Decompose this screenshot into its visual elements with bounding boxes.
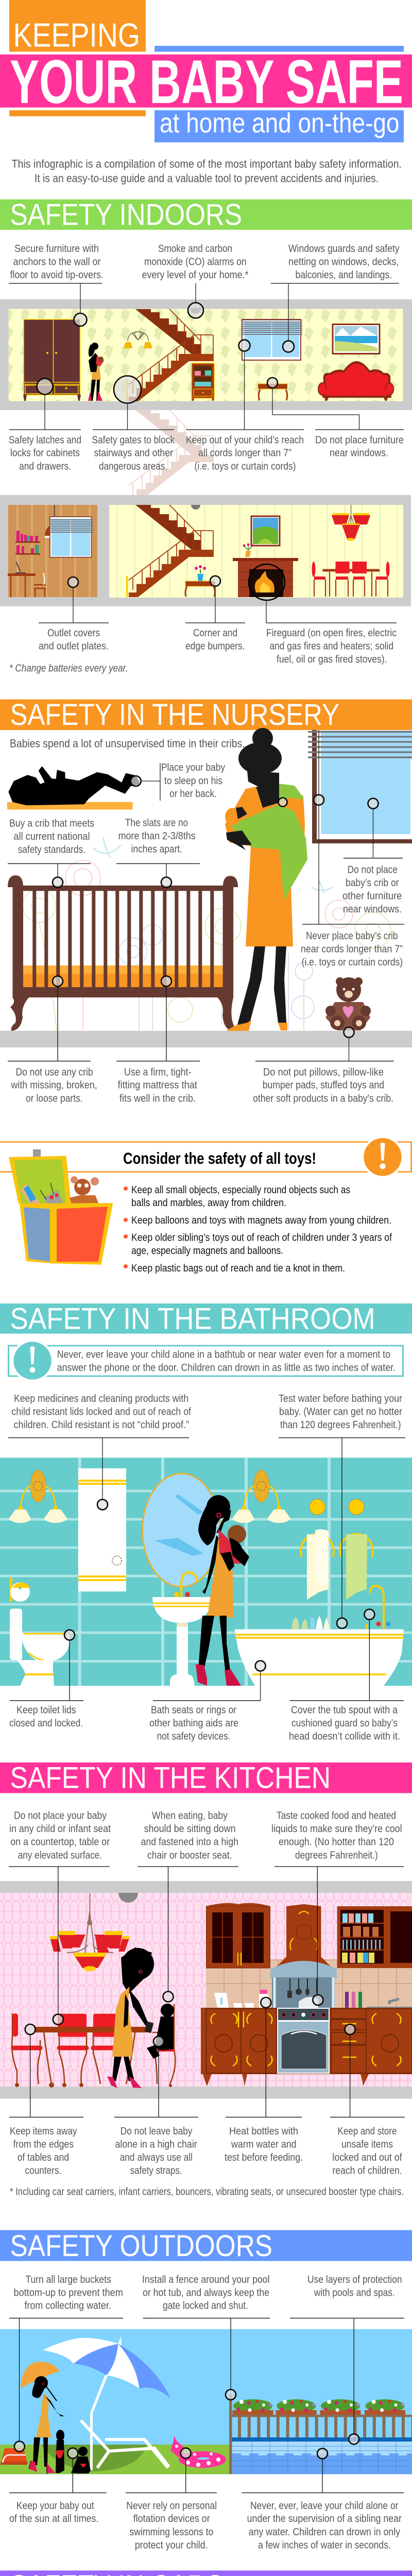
callout: corner bumpers: edge bumpers.	[185, 640, 245, 652]
callout: bath seats: not safety devices.	[157, 1730, 231, 1742]
heading: nursery: SAFETY IN THE NURSERY	[10, 698, 339, 732]
heading: safety indoors	[0, 198, 412, 232]
lounge chair	[81, 2420, 169, 2468]
list: toy rules	[124, 1184, 392, 1274]
callout: toilet lids: closed and locked.	[9, 1717, 83, 1729]
header: title block	[0, 0, 412, 142]
text: kitchen top callouts: When eating, baby	[152, 1810, 228, 1822]
callout: high chair straps: alone in a high chair	[115, 2139, 197, 2150]
header: title block: KEEPING	[13, 16, 140, 54]
text: kitchen top callouts: in any child or infant seat	[9, 1823, 111, 1835]
callout: no crib near windows: near windows.	[343, 903, 402, 915]
callout: window guards: netting on windows, decks,	[288, 256, 399, 268]
callout: cords: Keep out of your child’s reach	[186, 434, 304, 446]
text: kitchen top callouts	[9, 1810, 404, 1867]
callout: bath seats: Bath seats or rings or	[151, 1704, 236, 1716]
illustration: crib	[8, 875, 238, 1031]
callout: child alone near water: a few inches of water in seconds.	[258, 2539, 391, 2551]
callout: heat bottles	[225, 1997, 303, 2163]
callout: unsafe items: unsafe items	[341, 2139, 393, 2150]
callout: medicines: children. Child resistant is not “child proof.”	[13, 1419, 189, 1431]
callout: safety gates	[92, 376, 175, 472]
intro text	[11, 158, 402, 184]
list: toy rules: balls and marbles, away from children.	[131, 1197, 286, 1209]
heading: cars	[0, 2569, 412, 2576]
callout: unsafe items: Keep and store	[338, 2125, 397, 2137]
callout: firm mattress: fits well in the crib.	[119, 1092, 196, 1104]
text: kitchen top callouts: enough. (No hotter than 120	[279, 1836, 394, 1848]
illustration: pool scene	[0, 2329, 412, 2474]
panel: safety in the bathroom	[0, 1302, 412, 1742]
callout: fence: Install a fence around your pool	[142, 2274, 270, 2285]
callout: buckets: Turn all large buckets	[26, 2274, 111, 2285]
callout: toilet lids	[9, 1630, 83, 1729]
heading: outdoors: SAFETY OUTDOORS	[10, 2229, 272, 2263]
inflatable float	[170, 2436, 226, 2468]
icon: warning exclamation	[362, 1136, 404, 1178]
callout: missing parts: with missing, broken,	[11, 1079, 97, 1091]
callout: slats: more than 2-3/8ths	[118, 830, 196, 842]
callout: safety gates: dangerous areas.	[99, 460, 167, 472]
illustration: mother with baby in sling	[225, 728, 307, 1033]
list: toy rules: Keep plastic bags out of reach and tie a knot in them.	[131, 1262, 345, 1274]
heading: kitchen: SAFETY IN THE KITCHEN	[10, 1761, 331, 1795]
callout: no pillows: bumper pads, stuffed toys and	[263, 1079, 384, 1091]
text: nursery intro: Babies spend a lot of unsupervised time in their cribs.	[10, 737, 245, 750]
callout: high chair straps	[114, 2036, 198, 2177]
callout: no crib near windows: other furniture	[342, 890, 402, 902]
callout: heat bottles: test before feeding.	[225, 2151, 303, 2163]
callout: fence	[142, 2274, 270, 2400]
callout: layers of protection: with pools and spas.	[314, 2286, 395, 2298]
floor	[0, 1031, 412, 1047]
text: kitchen top callouts: chair or booster seat.	[147, 1849, 232, 1861]
callout: fence: gate locked and shut.	[163, 2300, 248, 2312]
stove and oven	[277, 2008, 330, 2074]
panel: safety outdoors	[0, 2229, 412, 2551]
callout: smoke alarms: monoxide (CO) alarms on	[144, 256, 246, 268]
heading: safety indoors: SAFETY INDOORS	[10, 198, 242, 232]
panel: safety in the nursery	[0, 698, 412, 1104]
illustration: bathroom scene	[0, 1458, 412, 1686]
callout: high chair eating	[163, 1867, 173, 2002]
callout: high chair straps: safety straps.	[130, 2165, 182, 2177]
illustration: upper floor room	[0, 299, 412, 410]
callout: slats	[116, 817, 200, 888]
callout: cords near crib	[301, 730, 404, 968]
callout: cords	[186, 340, 304, 472]
callout: taste food	[313, 1867, 323, 2005]
mother with parasol and children	[21, 2362, 91, 2474]
callout: sleep on back	[131, 761, 226, 801]
callout: no crib near windows	[342, 799, 403, 915]
callout: child seat on countertop	[53, 1867, 63, 2025]
callout: unsafe items	[330, 2024, 405, 2177]
illustration: nursery window	[308, 730, 412, 843]
callout box: never leave child alone	[8, 1340, 403, 1382]
text: kitchen top callouts: and fastened into a high	[141, 1836, 238, 1848]
callout: outlet covers: and outlet plates.	[39, 640, 109, 652]
callout: high chair straps: Do not leave baby	[121, 2125, 193, 2137]
illustration: kitchen scene	[0, 1881, 412, 2099]
callout: test water	[279, 1393, 405, 1629]
callout: slats: The slats are no	[125, 817, 188, 829]
footnote: batteries: * Change batteries every year.	[9, 663, 128, 674]
callout: crib standards: all current national	[13, 831, 90, 842]
callout: out of the sun	[9, 2448, 107, 2524]
callout: bath seats	[149, 1661, 266, 1742]
callout: sleep on back: Place your baby	[161, 761, 226, 773]
pool	[232, 2437, 412, 2474]
callout: edges of tables: of tables and	[18, 2151, 69, 2163]
callout: firm mattress: Use a firm, tight-	[124, 1066, 191, 1078]
fence and planters	[229, 2395, 412, 2474]
text: kitchen top callouts: degrees Fahrenheit.)	[295, 1849, 378, 1861]
callout: furniture near windows	[267, 378, 404, 459]
callout: medicines	[8, 1393, 191, 1510]
callout: flotation devices	[126, 2448, 217, 2551]
text block: lower callouts	[9, 564, 397, 674]
callout: smoke alarms: every level of your home.*	[142, 269, 249, 281]
callout: edges of tables: from the edges	[13, 2139, 74, 2150]
callout: flotation devices: protect your child.	[135, 2539, 208, 2551]
callout: fireguard: fuel, oil or gas fired stoves).	[277, 653, 387, 665]
callout: buckets	[9, 2274, 123, 2452]
callout: edges of tables: Keep items away	[10, 2125, 77, 2137]
callout: secure furniture: floor to avoid tip-overs.	[10, 269, 104, 281]
callout: smoke alarms: Smoke and carbon	[158, 243, 232, 255]
callout: unsafe items: locked and out of	[332, 2151, 402, 2163]
callout: medicines: child resistant lids locked and out of reach of	[11, 1405, 191, 1418]
callout: fence: or hot tub, and always keep the	[143, 2286, 269, 2298]
heading: consider toys: Consider the safety of all toys!	[123, 1149, 316, 1167]
callout: corner bumpers	[185, 576, 245, 652]
callout: sleep on back: or her back.	[169, 788, 217, 800]
callout: crib standards: Buy a crib that meets	[9, 817, 94, 829]
panel: toy safety	[0, 1136, 411, 1274]
callout: safety latches	[9, 378, 81, 472]
illustration: teddy bear	[325, 977, 371, 1030]
callout: heat bottles: warm water and	[231, 2139, 297, 2150]
callout: safety latches: and drawers.	[19, 460, 71, 472]
callout: no crib near windows: Do not place	[347, 863, 398, 875]
panel: safety in the kitchen	[0, 1761, 412, 2197]
callout: cords: all cords longer than 7”	[198, 447, 291, 459]
list: toy rules: Keep all small objects, especially round objects such as	[131, 1184, 350, 1196]
callout: missing parts: or loose parts.	[26, 1092, 83, 1104]
marker: sling	[278, 798, 287, 807]
callout: tub spout: head doesn’t collide with it.	[289, 1730, 400, 1742]
bucket	[1, 2448, 27, 2465]
callout: furniture near windows: near windows.	[330, 447, 388, 459]
callout: safety gates: Safety gates to block	[92, 434, 175, 446]
callout: slats: inches apart.	[131, 843, 182, 855]
callout: outlet covers	[39, 577, 109, 652]
callout: window guards: balconies, and landings.	[296, 269, 392, 281]
text: kitchen top callouts: on a countertop, table or	[10, 1836, 110, 1848]
callout: no pillows	[253, 1027, 394, 1104]
callout: heat bottles: Heat bottles with	[229, 2125, 298, 2137]
callout: high chair straps: and always use all	[120, 2151, 193, 2163]
callout: crib standards	[8, 817, 94, 888]
text: kitchen top callouts: Do not place your baby	[14, 1810, 107, 1822]
callout: corner bumpers: Corner and	[193, 627, 237, 639]
callout: outlet covers: Outlet covers	[47, 627, 100, 639]
callout: edges of tables: counters.	[25, 2165, 61, 2177]
text block: top callouts	[9, 243, 404, 472]
panel: safety indoors	[0, 198, 412, 674]
callout: edges of tables	[9, 2024, 83, 2177]
decorative ghost staircase	[129, 410, 213, 502]
callout: layers of protection	[290, 2274, 404, 2444]
callout: tub spout	[289, 1609, 404, 1742]
callout: toilet lids: Keep toilet lids	[16, 1704, 76, 1716]
callout: firm mattress	[116, 976, 200, 1104]
decorative floral wallpaper	[23, 837, 391, 1030]
callout: out of the sun: of the sun at all times.	[9, 2513, 98, 2524]
callout: cords: (i.e. toys or curtain cords)	[195, 460, 296, 472]
illustration: toy chest	[9, 1149, 113, 1265]
panel: safety in cars	[0, 2569, 412, 2576]
list: toy rules: age, especially magnets and balloons.	[131, 1245, 283, 1257]
callout: no pillows: other soft products in a baby's crib.	[253, 1092, 393, 1104]
text: kitchen top callouts: should be sitting down	[144, 1823, 236, 1835]
callout: flotation devices: flotation devices or	[133, 2513, 210, 2524]
callout: child alone near water	[242, 2448, 404, 2551]
callout: unsafe items: reach of children.	[332, 2165, 402, 2177]
callout: secure furniture: Secure furniture with	[14, 243, 99, 255]
callout: secure furniture: anchors to the wall or	[13, 256, 101, 268]
callout: flotation devices: Never rely on personal	[126, 2500, 217, 2512]
callout: flotation devices: swimming lessons to	[130, 2526, 213, 2538]
illustration: sleeping baby	[7, 767, 139, 809]
callout: fireguard: and gas fires and heaters; solid	[270, 640, 393, 652]
callout: secure furniture	[9, 243, 104, 326]
callout: missing parts: Do not use any crib	[16, 1066, 93, 1078]
callout: tub spout: Cover the tub spout with a	[291, 1704, 398, 1716]
callout: buckets: bottom-up to prevent them	[13, 2286, 123, 2298]
callout: no crib near windows: baby’s crib or	[346, 877, 399, 889]
callout: safety gates: stairways and other	[94, 447, 173, 459]
callout: firm mattress: fitting mattress that	[118, 1079, 197, 1091]
callout: window guards	[271, 243, 400, 352]
callout: sleep on back: to sleep on his	[164, 775, 222, 787]
callout: missing parts	[8, 976, 97, 1104]
illustration: lower floor rooms	[0, 495, 411, 606]
callout: out of the sun: Keep your baby out	[16, 2500, 94, 2512]
callout: smoke alarms	[142, 243, 249, 318]
callout: safety latches: locks for cabinets	[10, 447, 80, 459]
callout: safety latches: Safety latches and	[9, 434, 81, 446]
text: kitchen top callouts: any elevated surface.	[18, 1849, 102, 1861]
callout: medicines: Keep medicines and cleaning products with	[14, 1393, 188, 1404]
heading: bathroom: SAFETY IN THE BATHROOM	[10, 1302, 375, 1336]
callout: buckets: from collecting water.	[24, 2300, 111, 2312]
callout: crib standards: safety standards.	[18, 844, 85, 855]
callout: no pillows: Do not put pillows, pillow-like	[263, 1066, 384, 1078]
callout: fireguard	[249, 564, 397, 665]
callout: bath seats: other bathing aids are	[149, 1717, 238, 1729]
beach umbrella	[43, 2336, 171, 2470]
